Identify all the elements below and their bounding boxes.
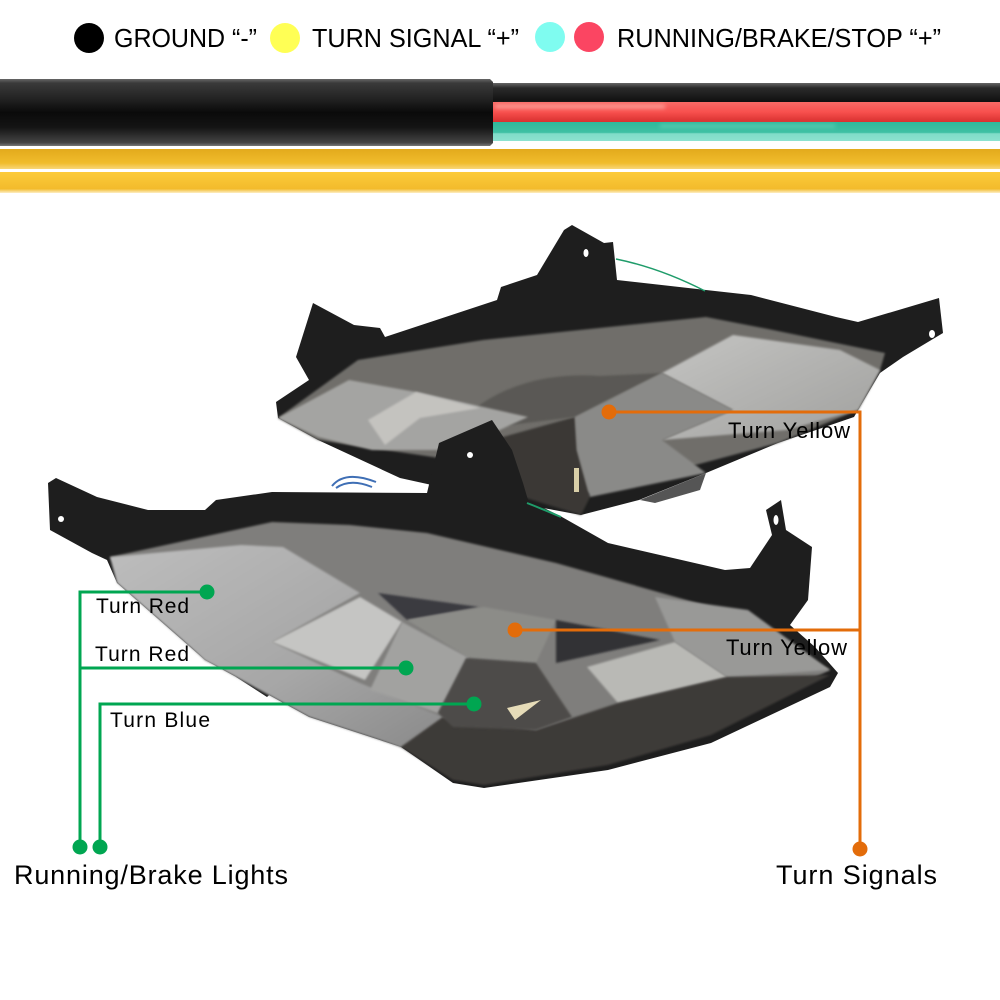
front lamp dark lower zone bbox=[401, 675, 830, 785]
legend dot: ground bbox=[74, 23, 104, 53]
front lamp dark right wedge bbox=[556, 620, 660, 663]
label: turn yellow lower: Turn Yellow bbox=[726, 635, 847, 660]
front lamp diamond reflection bbox=[507, 700, 541, 720]
wire: black bbox=[488, 83, 1000, 103]
heading: running brake lights: Running/Brake Lights bbox=[14, 860, 288, 890]
legend dot: turn signal bbox=[270, 23, 300, 53]
front lamp right bright facet bbox=[587, 642, 727, 703]
label: turn red lower: Turn Red bbox=[95, 643, 189, 666]
callout line: upper lamp bbox=[609, 412, 860, 849]
front lamp bracket holes bbox=[58, 452, 778, 525]
front lamp centre pod bbox=[438, 658, 572, 730]
cable jacket bbox=[0, 79, 493, 146]
rear lamp left panel bbox=[278, 380, 528, 450]
rear lamp photo bbox=[276, 225, 943, 515]
label: turn yellow upper: Turn Yellow bbox=[728, 418, 850, 443]
front lamp lens band bbox=[110, 522, 830, 747]
callout line: turn red lower bbox=[80, 666, 406, 670]
legend dot: cyan wire bbox=[535, 22, 565, 52]
rear lamp underside tab bbox=[640, 473, 706, 503]
front lamp photo bbox=[48, 420, 838, 788]
wire: yellow upper bbox=[0, 149, 1000, 169]
front lamp housing bbox=[48, 420, 838, 788]
orange callouts: turn signals bbox=[508, 404, 937, 890]
green callouts: running brake lights bbox=[14, 584, 482, 890]
legend bbox=[74, 22, 941, 53]
label: turn blue: Turn Blue bbox=[110, 709, 210, 732]
legend label: ground: GROUND “-” bbox=[114, 23, 257, 53]
front lamp underside tab bbox=[236, 672, 275, 697]
callout dots bbox=[72, 584, 482, 854]
rear lamp sticker bbox=[574, 468, 579, 492]
wire: teal bbox=[488, 122, 1000, 141]
wire: yellow lower bbox=[0, 172, 1000, 193]
wire: red bbox=[488, 102, 1000, 122]
callout line: turn red upper bbox=[80, 592, 207, 847]
front lamp lobe bbox=[407, 607, 556, 663]
front lamp left panel bbox=[110, 545, 443, 747]
legend dot: red wire bbox=[574, 22, 604, 52]
callout line: turn blue bbox=[100, 704, 474, 847]
heading: turn signals: Turn Signals bbox=[776, 860, 937, 890]
rear lamp green wire bbox=[616, 259, 705, 291]
front lamp dark wedge bbox=[378, 593, 479, 620]
wire highlights bbox=[210, 88, 835, 179]
rear lamp bracket holes bbox=[584, 249, 935, 338]
front lamp bright facet bbox=[272, 597, 402, 680]
rear lamp lower dark zone bbox=[456, 417, 590, 515]
rear lamp right panel bbox=[662, 335, 880, 440]
front lamp green wire bbox=[527, 503, 561, 517]
rear lamp housing bbox=[276, 225, 943, 515]
rear lamp bright left facet bbox=[368, 392, 480, 445]
callout line: lower lamp bbox=[515, 628, 860, 632]
legend label: turn signal: TURN SIGNAL “+” bbox=[312, 23, 519, 53]
label: turn red upper: Turn Red bbox=[96, 595, 189, 618]
cable illustration bbox=[0, 79, 1000, 193]
legend label: running brake stop: RUNNING/BRAKE/STOP “+” bbox=[617, 23, 941, 53]
front lamp right facet bbox=[655, 597, 830, 677]
connector wires bbox=[332, 477, 376, 488]
rear lamp centre lobe bbox=[575, 373, 733, 497]
rear lamp arc bbox=[456, 373, 662, 430]
front lamp grey segment bbox=[370, 622, 469, 713]
rear lamp lens dark band bbox=[278, 317, 885, 493]
callout dots bbox=[508, 404, 868, 856]
